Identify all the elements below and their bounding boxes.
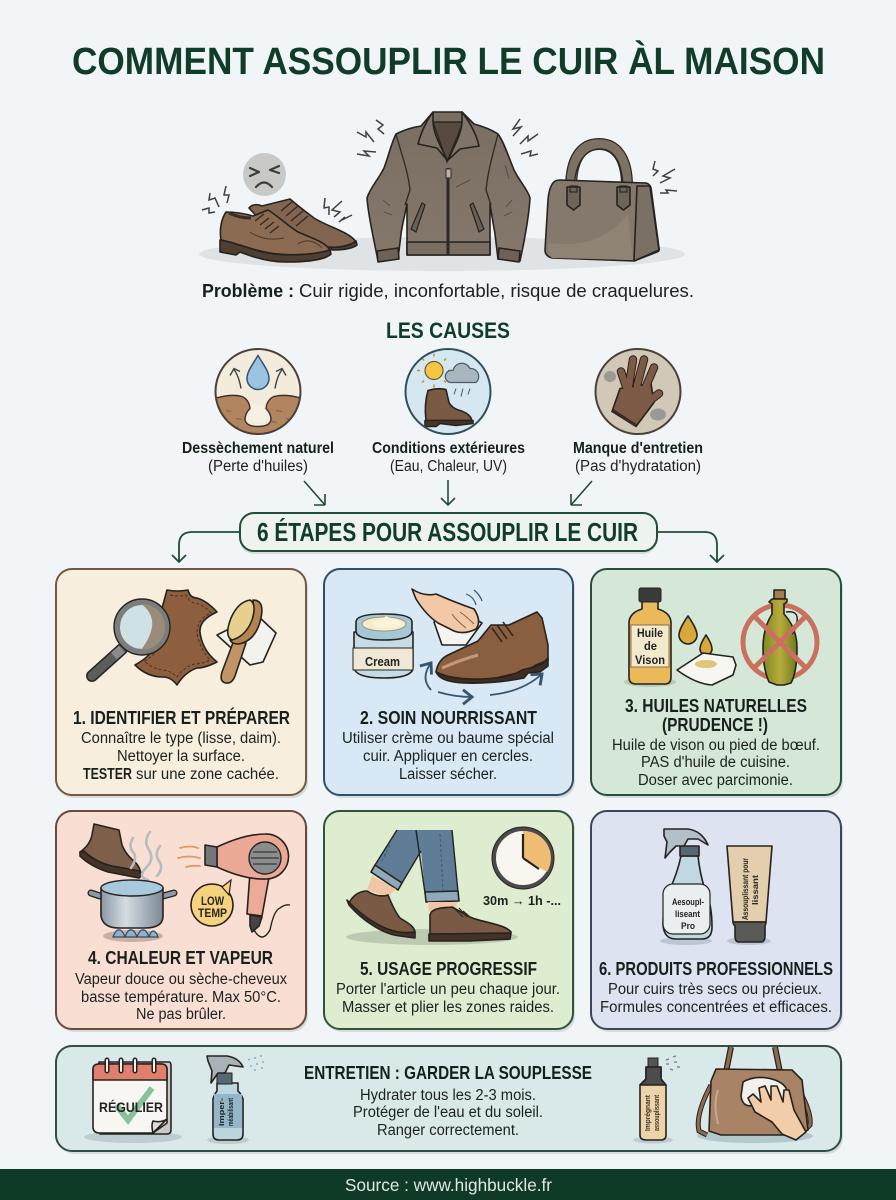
icon: hair dryer: [178, 834, 290, 937]
text: step 2: Utiliser crème ou baume spécial: [342, 730, 554, 747]
text: step 3: [612, 696, 820, 789]
text: step 5: Masser et plier les zones raides.: [342, 999, 554, 1016]
footer: source: Source : www.highbuckle.fr: [345, 1175, 552, 1195]
icon: weather and boot: [406, 349, 490, 434]
text: step 6: 6. PRODUITS PROFESSIONNELS: [599, 959, 833, 979]
text: step 1: sur une zone cachée.: [136, 766, 279, 783]
text: step 5: 5. USAGE PROGRESSIF: [360, 959, 537, 979]
icon: small conditioner spray: Imprégnant: [643, 1095, 652, 1131]
icon: mink oil bottle: Vison: [635, 655, 665, 667]
footer: source: [0, 1169, 896, 1200]
icon: cream jar: Cream: [365, 655, 400, 669]
clock caption: 30m → 1h -...: [483, 893, 561, 908]
icon: professional tube: Assouplissant pour: [740, 857, 750, 920]
icon: skin drying: [214, 349, 302, 438]
panel: step 3: [591, 569, 843, 798]
heading: les causes: LES CAUSES: [386, 318, 510, 343]
label: Conditions extérieures: [372, 440, 525, 457]
cause: conditions extérieures: [372, 349, 525, 475]
text: step 2: [342, 708, 554, 783]
icon: professional tube: lissant: [750, 875, 760, 905]
label: (Pas d'hydratation): [575, 458, 701, 475]
icon: hand polishing shoe: [412, 589, 548, 683]
icon: stiff shoes: [220, 199, 357, 262]
icon: leather hide, magnifier, brush: [92, 590, 276, 685]
label: [182, 440, 334, 475]
title: COMMENT ASSOUPLIR LE CUIR ÀL MAISON: [72, 39, 825, 83]
icon: impregnating spray: Imper-: [217, 1097, 226, 1126]
icon: dusty glove: [596, 349, 680, 434]
label: Manque d'entretien: [573, 440, 703, 457]
text: entretien: Protéger de l'eau et du soleil.: [353, 1104, 543, 1121]
panel: step 6: [591, 811, 843, 1032]
callout: low temp: TEMP: [198, 908, 227, 920]
panel: entretien: [56, 1046, 843, 1154]
text: entretien: [304, 1063, 592, 1139]
label: (Perte d'huiles): [208, 458, 308, 475]
text: step 3: (PRUDENCE !): [662, 715, 768, 735]
hero illustration: stiff leather items: [199, 112, 685, 271]
text: step 4: basse température. Max 50°C.: [81, 989, 281, 1006]
text: step 4: 4. CHALEUR ET VAPEUR: [88, 948, 273, 968]
panel: step 5: [324, 811, 575, 1032]
text: step 5: Porter l'article un peu chaque jour.: [336, 981, 560, 998]
connector arrows from banner: [172, 532, 724, 562]
text: step 6: Formules concentrées et efficaces.: [600, 999, 832, 1016]
icon: stiff handbag: [545, 144, 659, 261]
text: entretien: ENTRETIEN : GARDER LA SOUPLESSE: [304, 1063, 592, 1083]
text: step 6: Pour cuirs très secs ou précieux.: [608, 981, 822, 998]
cause: manque d'entretien: [573, 349, 703, 475]
icon: mink oil bottle: de: [644, 641, 657, 653]
text: step 2: 2. SOIN NOURRISSANT: [360, 708, 537, 728]
text: entretien: Hydrater tous les 2-3 mois.: [360, 1087, 536, 1104]
icon: stress marks around jacket: [357, 119, 538, 156]
text: step 1: 1. IDENTIFIER ET PRÉPARER: [73, 707, 290, 728]
icon: professional spray: [660, 829, 712, 945]
cause: dessèchement naturel: [182, 349, 334, 475]
label: Dessèchement naturel: [182, 440, 334, 457]
panel: step 2: [324, 569, 575, 798]
text: step 1: [73, 707, 290, 783]
text: step 3: Doser avec parcimonie.: [638, 772, 793, 789]
text: step 1: Connaître le type (lisse, daim).: [81, 730, 281, 747]
text: step 4: [75, 948, 287, 1023]
icon: professional spray: Aesoupl-: [672, 897, 704, 908]
banner: 6 étapes: [240, 513, 657, 554]
ground shadow: [199, 237, 685, 271]
icon: pot on burner: [91, 880, 174, 942]
banner: 6 étapes: 6 ÉTAPES POUR ASSOUPLIR LE CUIR: [257, 518, 638, 547]
problem statement: Cuir rigide, inconfortable, risque de craquelures.: [299, 280, 694, 301]
icon: stress marks around bag: [653, 161, 677, 193]
label: (Eau, Chaleur, UV): [390, 458, 507, 475]
icon: small conditioner spray: [633, 1056, 680, 1144]
text: step 3: 3. HUILES NATURELLES: [625, 696, 807, 716]
text: step 3: Huile de vison ou pied de bœuf.: [612, 737, 820, 754]
icon: mink oil bottle: Huile: [637, 628, 663, 640]
icon: sad face: [243, 153, 286, 196]
icon: stiff jacket: [367, 112, 530, 262]
panel: step 1: [56, 569, 308, 798]
icon: calendar: [84, 1060, 182, 1143]
text: step 1: Nettoyer la surface.: [117, 748, 245, 765]
text: step 6: [599, 959, 833, 1016]
icon: professional spray: Pro: [681, 921, 695, 932]
icon: mink oil bottle: [624, 588, 676, 687]
icon: clock: [492, 827, 554, 889]
text: step 3: PAS d'huile de cuisine.: [641, 754, 790, 771]
icon: circular motion arrows: [426, 663, 542, 697]
icon: impregnating spray: [207, 1056, 264, 1144]
icon: bag being wiped: [697, 1047, 813, 1143]
icon: small conditioner spray: assouplissant: [652, 1095, 661, 1131]
callout: low temp: [191, 880, 233, 926]
panel: step 4: [56, 811, 308, 1032]
icon: boot over steam: [80, 824, 161, 880]
text: step 4: Ne pas brûler.: [136, 1006, 226, 1023]
text: step 2: Laisser sécher.: [399, 766, 497, 783]
text: step 1: TESTER: [83, 766, 132, 783]
text: entretien: Ranger correctement.: [377, 1122, 519, 1139]
icon: stress marks around shoes: [202, 186, 352, 222]
text: step 2: cuir. Appliquer en cercles.: [363, 748, 533, 765]
icon: crossed out cooking oil: [743, 590, 817, 685]
arrows from causes to steps: [304, 480, 592, 505]
icon: drops and cloth: [677, 616, 736, 685]
icon: walking legs: [346, 830, 518, 945]
icon: professional tube: [727, 846, 772, 945]
icon: impregnating spray: méabilisant: [226, 1098, 235, 1126]
callout: low temp: LOW: [201, 896, 224, 908]
icon: cream jar: [353, 614, 413, 678]
icon: professional spray: liseant: [675, 909, 701, 920]
icon: calendar: RÉGULIER: [99, 1099, 163, 1115]
label: [372, 440, 525, 475]
text: step 5: [336, 959, 560, 1016]
problem statement: Problème :: [202, 280, 294, 301]
label: [573, 440, 703, 475]
text: step 4: Vapeur douce ou sèche-cheveux: [75, 971, 287, 988]
